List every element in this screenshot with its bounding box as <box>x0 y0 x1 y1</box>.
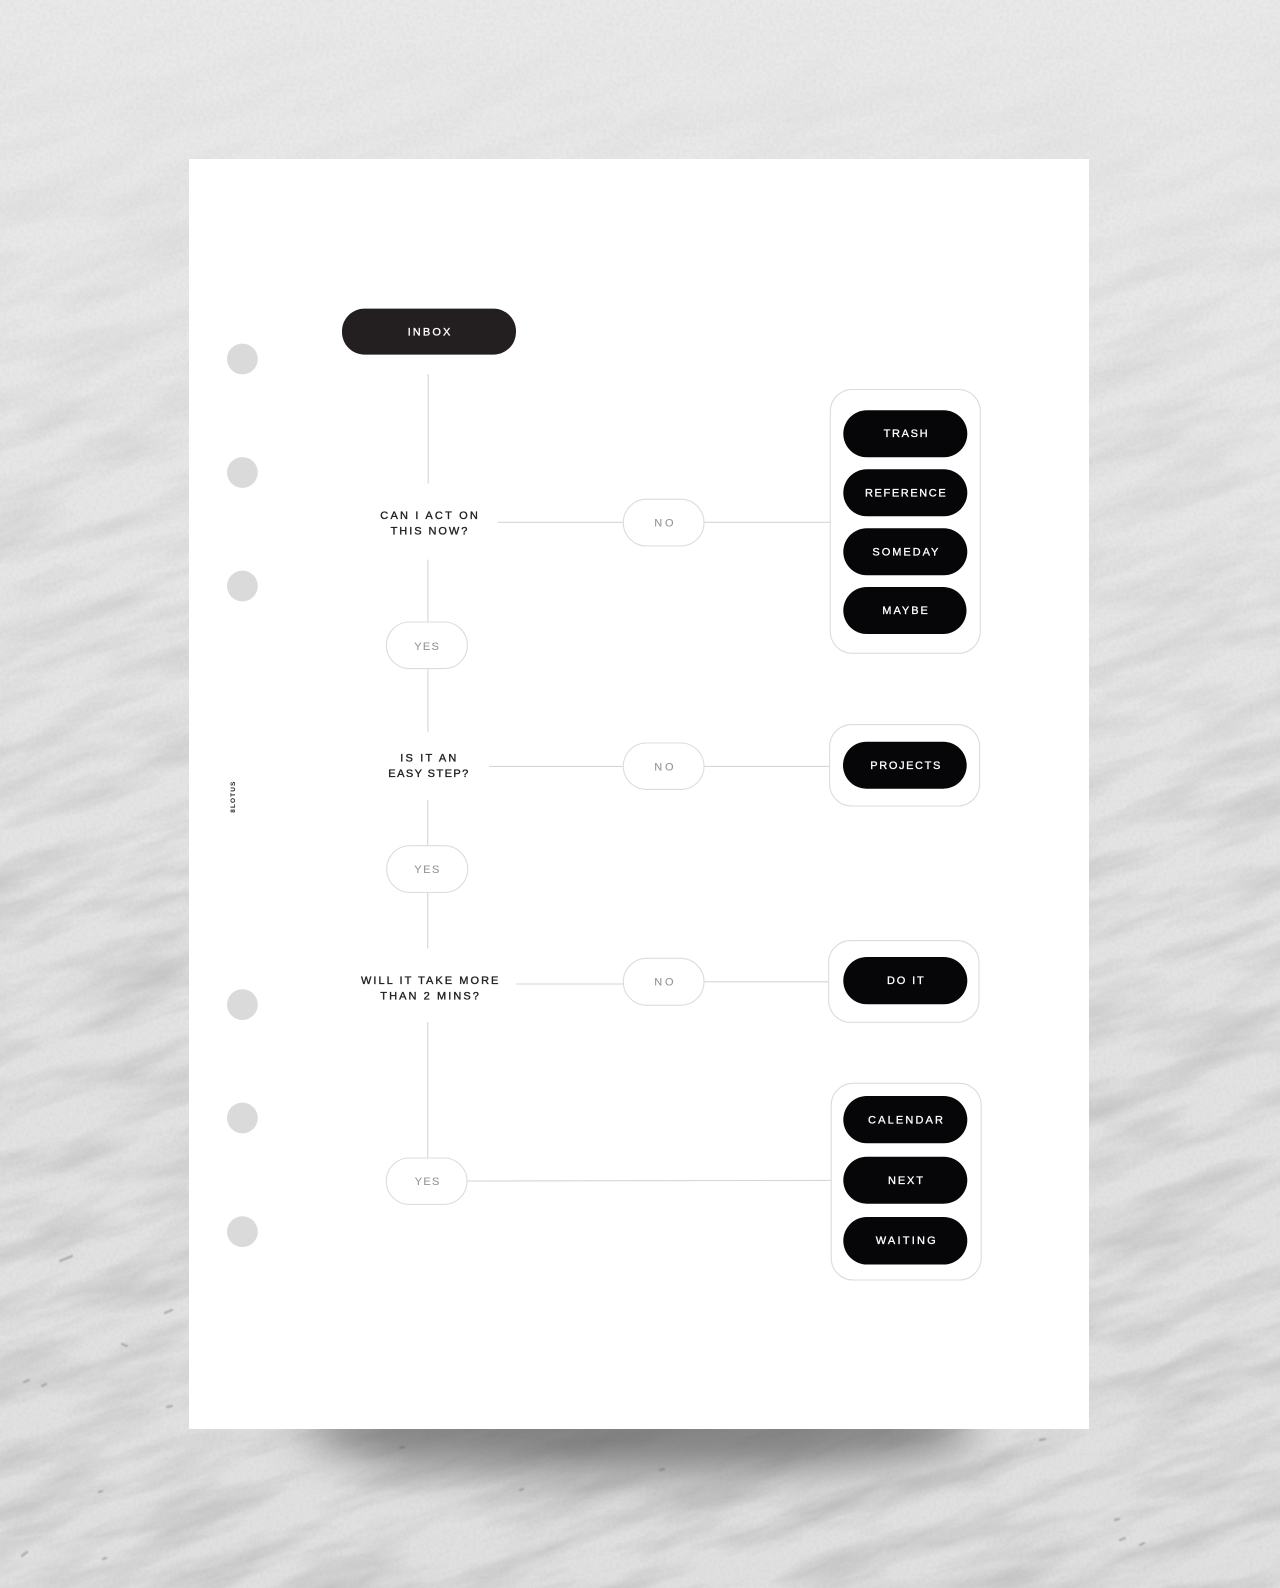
panel: projects <box>830 725 980 806</box>
button: maybe: MAYBE <box>882 605 928 617</box>
button: projects: PROJECTS <box>870 760 940 772</box>
button: next <box>843 1157 967 1204</box>
connector lines <box>428 374 831 1181</box>
question: will it take more than 2 mins <box>361 975 498 1003</box>
button: next: NEXT <box>888 1175 923 1187</box>
panel: do it <box>829 941 979 1022</box>
button: waiting <box>843 1217 967 1264</box>
yes pill 1 <box>386 622 467 669</box>
yes pill 2: YES <box>414 864 439 876</box>
panel: calendar, next, waiting <box>831 1083 981 1280</box>
button: maybe <box>843 587 966 634</box>
button: someday <box>843 528 967 575</box>
question: can I act on this now: CAN I ACT ON <box>380 510 478 522</box>
button: waiting: WAITING <box>876 1235 936 1247</box>
white planner page <box>189 159 1089 1429</box>
question: can I act on this now: THIS NOW? <box>391 525 467 537</box>
button: projects <box>843 742 967 789</box>
yes pill 3 <box>386 1158 467 1204</box>
button: someday: SOMEDAY <box>872 546 939 558</box>
no pill 2 <box>623 743 704 789</box>
no pill 1: NO <box>654 517 674 529</box>
panel: trash, reference, someday, maybe <box>830 390 980 653</box>
button: trash <box>843 410 967 457</box>
yes pill 3: YES <box>415 1176 439 1188</box>
button: reference: REFERENCE <box>865 487 946 499</box>
question: is it an easy step: IS IT AN <box>400 752 456 764</box>
button: trash: TRASH <box>884 428 928 440</box>
no pill 3 <box>623 958 704 1005</box>
question: will it take more than 2 mins: THAN 2 MINS? <box>380 991 479 1003</box>
question: will it take more than 2 mins: WILL IT TAKE MORE <box>361 975 498 987</box>
punched holes <box>227 344 258 1247</box>
no pill 2: NO <box>654 761 674 773</box>
yes pill 1: YES <box>414 641 439 653</box>
brand label: 8LOTUS: 8LOTUS <box>230 781 237 813</box>
question: is it an easy step <box>388 752 468 780</box>
button: calendar: CALENDAR <box>868 1114 943 1126</box>
start node: inbox: INBOX <box>408 326 451 338</box>
no pill 1 <box>623 499 704 546</box>
no pill 3: NO <box>654 977 674 989</box>
start node: inbox <box>342 309 516 355</box>
button: reference <box>843 469 967 516</box>
button: do it <box>843 957 967 1004</box>
yes pill 2 <box>387 846 468 892</box>
page shadow <box>286 1429 996 1503</box>
question: can I act on this now <box>380 510 478 537</box>
question: is it an easy step: EASY STEP? <box>388 768 468 780</box>
button: calendar <box>843 1096 967 1143</box>
button: do it: DO IT <box>887 975 924 987</box>
